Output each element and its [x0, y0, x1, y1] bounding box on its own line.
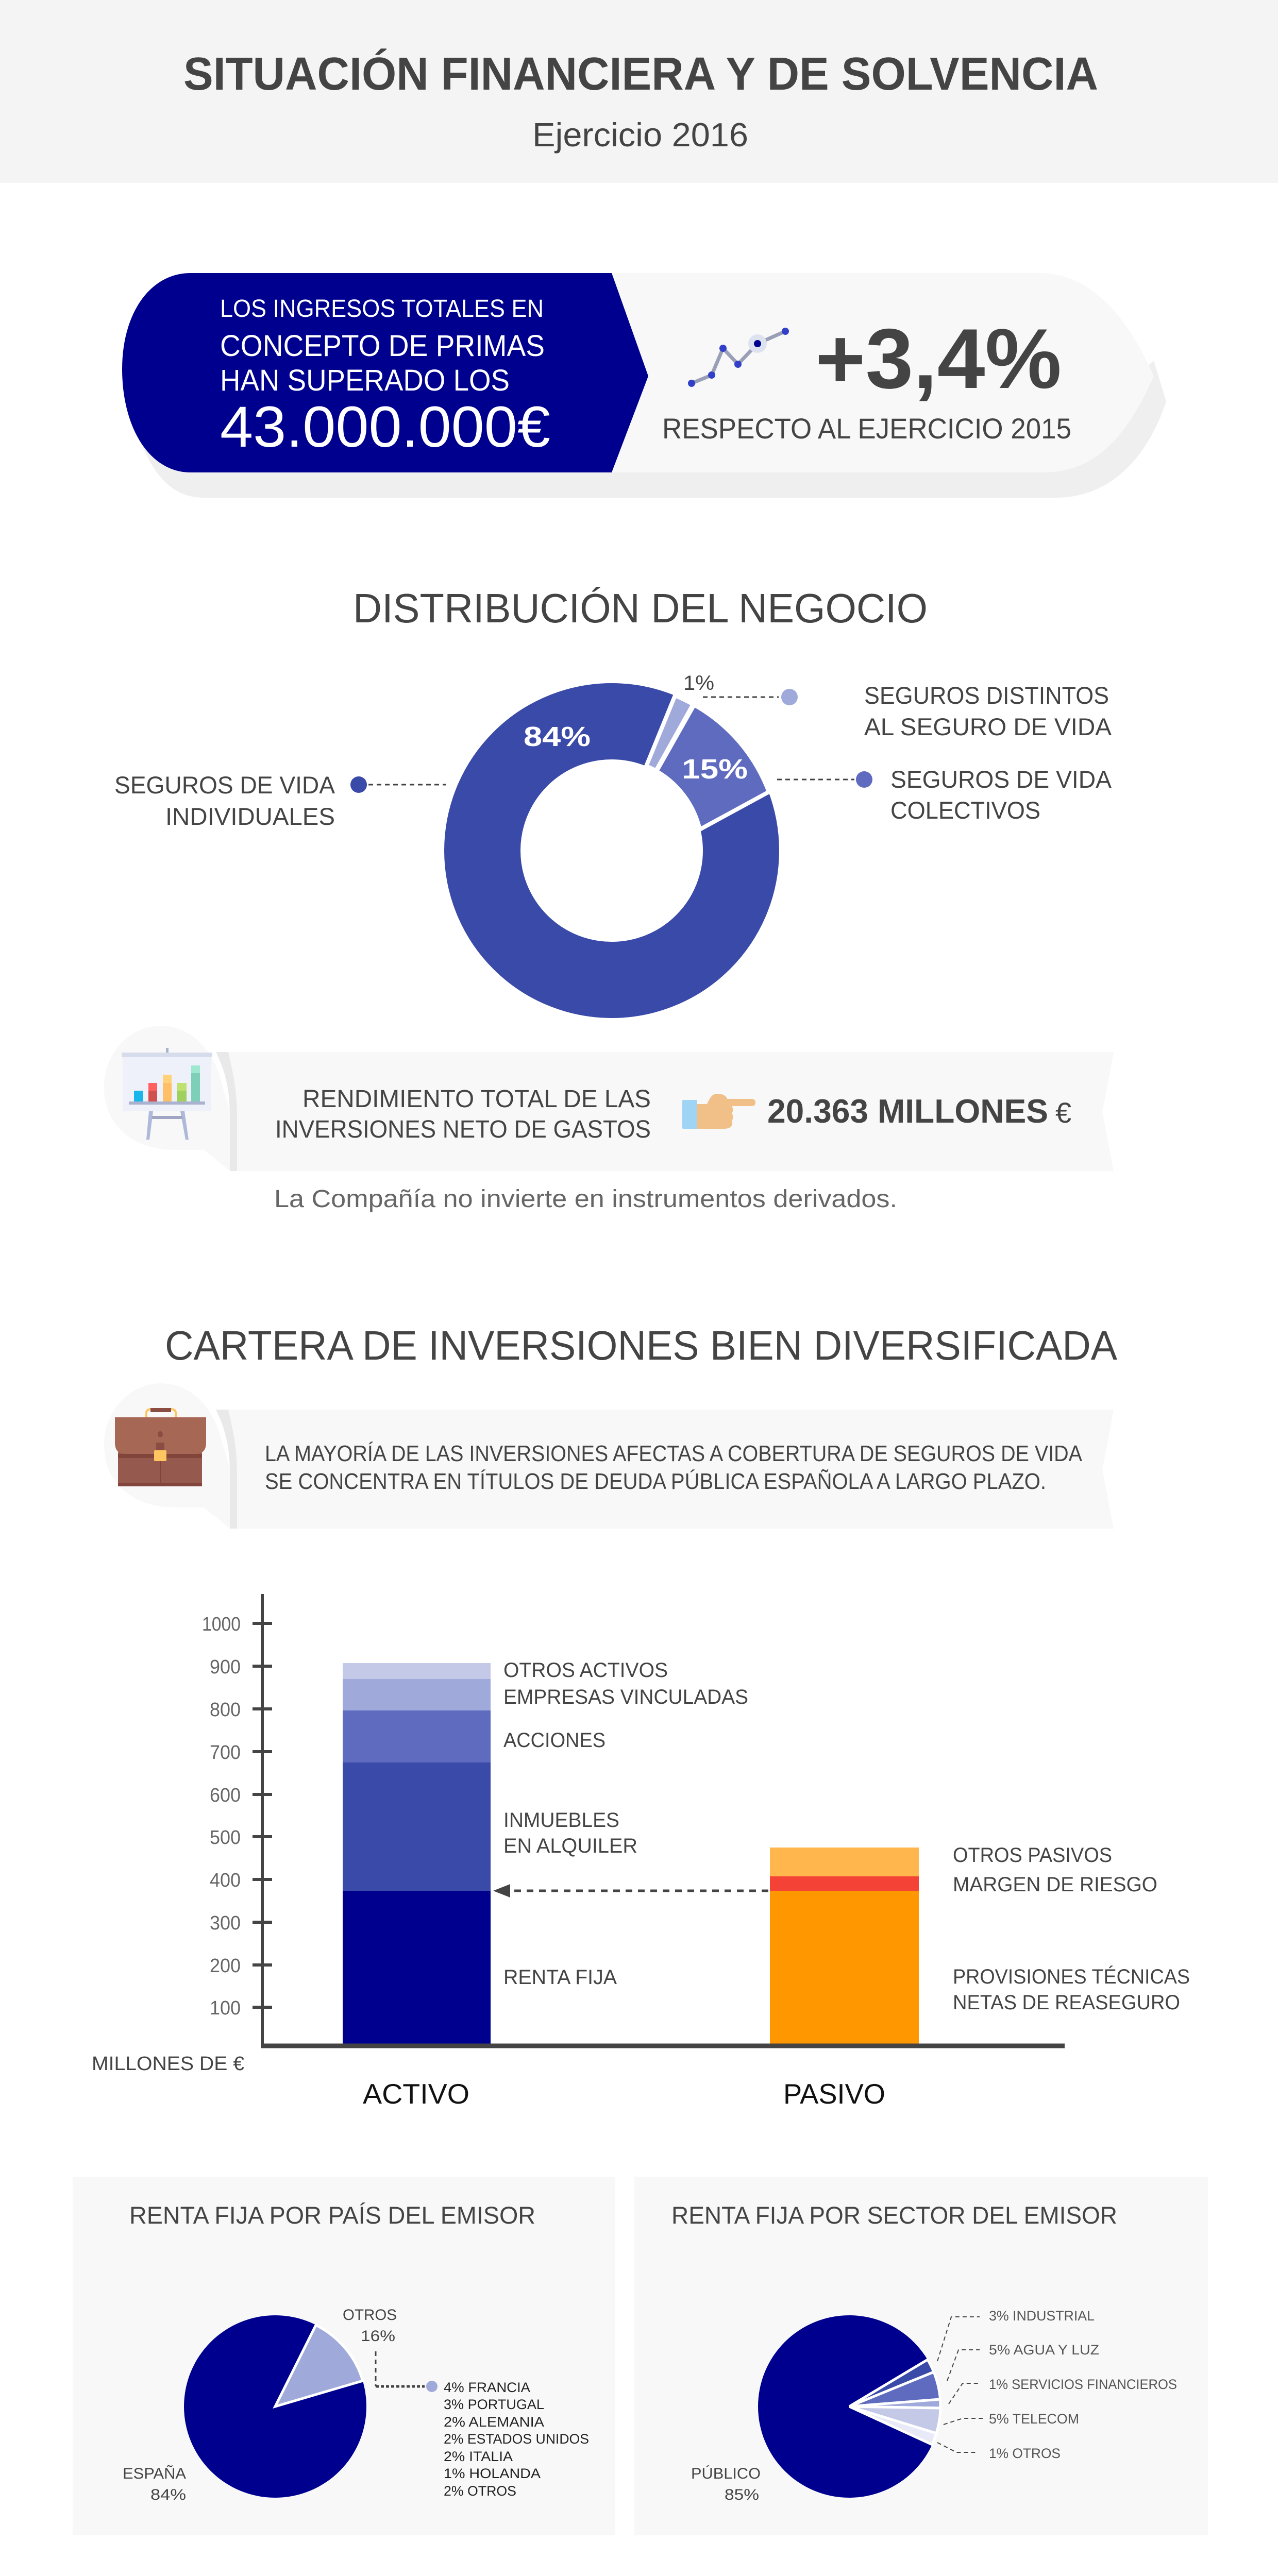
- sector labels: 1% SERVICIOS FINANCIEROS: [989, 2377, 1177, 2392]
- panel: mayoría de las inversiones: [104, 1383, 1114, 1529]
- banner text: income: LOS INGRESOS TOTALES EN: [220, 295, 544, 323]
- labels: activo: RENTA FIJA: [503, 1966, 617, 1989]
- axis label: pasivo: PASIVO: [783, 2078, 885, 2110]
- unit label: MILLONES DE €: [92, 2053, 244, 2075]
- y axis: 500: [210, 1827, 241, 1849]
- donut chart: [482, 696, 769, 980]
- y axis: 400: [210, 1870, 241, 1891]
- heading: cartera de inversiones: CARTERA DE INVERSIONES BIEN DIVERSIFICADA: [165, 1323, 1118, 1368]
- heading: distribución del negocio: DISTRIBUCIÓN DEL NEGOCIO: [353, 585, 928, 631]
- subtitle: Ejercicio 2016: [532, 116, 748, 154]
- label: 1% seguros distintos: 1%: [683, 672, 714, 694]
- y axis: 1000: [202, 1614, 241, 1635]
- labels: pasivo: MARGEN DE RIESGO: [953, 1873, 1157, 1896]
- list: otros países: 4% FRANCIA: [444, 2380, 530, 2395]
- slice 15%: [657, 705, 769, 829]
- label: público: PÚBLICO: [691, 2465, 761, 2482]
- value: 20.363 millones: 20.363 MILLONES€: [767, 1092, 1071, 1130]
- labels: pasivo: [953, 1844, 1190, 2014]
- label: seguros de vida individuales: INDIVIDUALES: [165, 803, 335, 830]
- label: españa: 84%: [150, 2486, 186, 2503]
- x axis: [261, 2043, 1065, 2048]
- label: otros: [343, 2307, 438, 2392]
- label: 1% seguros distintos: SEGUROS DISTINTOS: [864, 682, 1109, 709]
- sector labels: 1% OTROS: [989, 2446, 1061, 2461]
- panel: renta fija por país: [73, 2177, 615, 2535]
- text: rendimiento: INVERSIONES NETO DE GASTOS: [275, 1116, 651, 1143]
- text: rendimiento: [275, 1086, 651, 1143]
- note: derivados: La Compañía no invierte en instrumentos derivados.: [274, 1185, 897, 1213]
- icon: briefcase: [115, 1408, 206, 1486]
- bar: activo: [343, 1663, 491, 2044]
- panel title: RENTA FIJA POR PAÍS DEL EMISOR: [129, 2201, 535, 2229]
- banner: premium income: [122, 273, 1166, 498]
- growth figure: +3,4%: [815, 311, 1062, 406]
- header band: [0, 0, 1278, 183]
- panel title: RENTA FIJA POR SECTOR DEL EMISOR: [671, 2201, 1117, 2229]
- icon: rising line chart: [688, 328, 789, 387]
- sector labels: 5% TELECOM: [989, 2411, 1079, 2427]
- banner text: income: HAN SUPERADO LOS: [220, 364, 510, 397]
- list: otros países: 2% ITALIA: [444, 2449, 513, 2464]
- text: mayoría: [265, 1441, 1083, 1494]
- label: seguros de vida colectivos: SEGUROS DE VIDA: [890, 766, 1112, 793]
- text: mayoría: SE CONCENTRA EN TÍTULOS DE DEUDA PÚBLICA ESPAÑOLA A LARGO PLAZO.: [265, 1468, 1046, 1494]
- label: españa: [123, 2465, 186, 2503]
- sector labels: 5% AGUA Y LUZ: [989, 2342, 1099, 2358]
- banner text: income: CONCEPTO DE PRIMAS: [220, 329, 545, 363]
- labels: pasivo: OTROS PASIVOS: [953, 1844, 1112, 1867]
- label: público: 85%: [725, 2486, 759, 2503]
- y axis: [202, 1594, 272, 2046]
- value 15%: 15%: [682, 754, 748, 785]
- labels: activo: OTROS ACTIVOS: [503, 1659, 668, 1682]
- label: público: [691, 2465, 761, 2503]
- y axis: 700: [210, 1742, 241, 1764]
- icon: presentation board: [122, 1048, 212, 1140]
- y axis: 200: [210, 1955, 241, 1977]
- slice 1%: [646, 696, 693, 771]
- labels: activo: EN ALQUILER: [503, 1835, 637, 1857]
- list: otros países: 3% PORTUGAL: [444, 2397, 544, 2412]
- labels: activo: [503, 1659, 748, 1989]
- panel: renta fija por sector: [634, 2177, 1208, 2535]
- icon: pointing hand: [682, 1094, 755, 1129]
- text: rendimiento: RENDIMIENTO TOTAL DE LAS: [302, 1086, 651, 1113]
- labels: pasivo: NETAS DE REASEGURO: [953, 1991, 1180, 2014]
- label: otros: OTROS: [343, 2307, 397, 2324]
- label: seguros de vida individuales: SEGUROS DE VIDA: [114, 771, 335, 799]
- banner text: income: 43.000.000€: [220, 395, 550, 459]
- bar chart: activo y pasivo: [92, 1594, 1190, 2110]
- y axis: 300: [210, 1912, 241, 1934]
- leader lines: [937, 2317, 983, 2452]
- list: otros países: 1% HOLANDA: [444, 2466, 541, 2481]
- value 84%: 84%: [524, 721, 591, 752]
- y axis: 800: [210, 1699, 241, 1721]
- growth caption: RESPECTO AL EJERCICIO 2015: [662, 412, 1071, 445]
- sector labels: [989, 2308, 1177, 2461]
- label: otros: 16%: [361, 2328, 395, 2345]
- y axis: 600: [210, 1785, 241, 1806]
- pie chart: sector: [758, 2315, 940, 2498]
- label: españa: ESPAÑA: [123, 2465, 186, 2482]
- banner text: income: [220, 295, 550, 459]
- pie chart: país: [184, 2315, 366, 2498]
- list: otros países: 2% ALEMANIA: [444, 2414, 544, 2430]
- label: 1% seguros distintos: [683, 672, 1112, 740]
- panel: rendimiento: [104, 1026, 1114, 1171]
- list: otros países: [444, 2380, 589, 2499]
- label: seguros de vida individuales: [114, 771, 446, 830]
- list: otros países: 2% ESTADOS UNIDOS: [444, 2431, 589, 2447]
- y axis: 100: [210, 1997, 241, 2019]
- sector labels: 3% INDUSTRIAL: [989, 2308, 1095, 2324]
- y axis: 900: [210, 1656, 241, 1678]
- text: mayoría: LA MAYORÍA DE LAS INVERSIONES AFECTAS A COBERTURA DE SEGUROS DE VIDA: [265, 1441, 1083, 1466]
- arrow: [493, 1884, 768, 1897]
- label: seguros de vida colectivos: COLECTIVOS: [890, 796, 1040, 824]
- list: otros países: 2% OTROS: [444, 2483, 516, 2499]
- axis label: activo: ACTIVO: [363, 2078, 469, 2110]
- labels: pasivo: PROVISIONES TÉCNICAS: [953, 1965, 1190, 1988]
- label: 1% seguros distintos: AL SEGURO DE VIDA: [864, 713, 1112, 740]
- title: SITUACIÓN FINANCIERA Y DE SOLVENCIA: [183, 48, 1098, 100]
- bar: pasivo: [770, 1848, 919, 2044]
- label: seguros de vida colectivos: [777, 766, 1112, 824]
- labels: activo: EMPRESAS VINCULADAS: [503, 1686, 748, 1708]
- labels: activo: INMUEBLES: [503, 1809, 619, 1832]
- labels: activo: ACCIONES: [503, 1729, 606, 1752]
